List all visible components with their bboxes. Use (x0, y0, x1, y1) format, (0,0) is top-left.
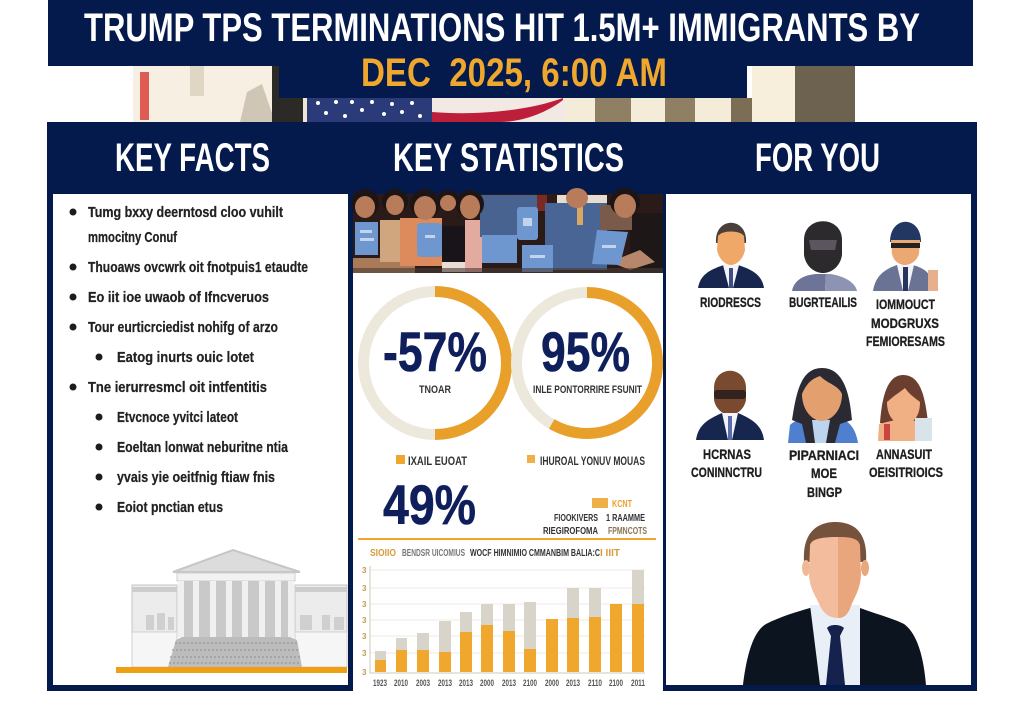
chart title (370, 548, 620, 559)
panel: key facts bullets: Eoiot pnctian etus (117, 499, 223, 516)
stacked bar chart: 3 (362, 584, 367, 593)
person 5: woman with long hair: BINGP (807, 484, 842, 500)
heading: key statistics: KEY STATISTICS (393, 136, 624, 180)
stacked bar chart: 2013 (502, 678, 516, 688)
person 4: man with dark skin: CONINNCTRU (691, 464, 762, 480)
panel: key facts bullets: Tne ierurresmcl oit intfentitis (88, 379, 267, 396)
legend: right item (527, 454, 645, 468)
statistic: 49%: 49% (383, 473, 476, 536)
donut chart: 95% (516, 292, 658, 434)
person 4: man with dark skin (691, 371, 764, 480)
legend: left item (396, 454, 468, 468)
panel: key facts bullets: Tour eurticrciedist nohifg of arzo (88, 319, 278, 336)
person 1: man in navy suit: RIODRESCS (700, 294, 761, 310)
person 2: bearded man (789, 221, 857, 310)
heading: for you: FOR YOU (755, 136, 880, 180)
stacked bar chart: 2010 (394, 678, 408, 688)
small key block: 1 RAAMME (606, 513, 645, 524)
small key block: FPMNCOTS (608, 526, 647, 537)
donut chart: -57%: -57% (383, 320, 487, 383)
person 3: man with glasses (866, 222, 945, 349)
title text line 2: DEC 2025, 6:00 AM (361, 51, 667, 95)
image: crowd holding documents (351, 188, 663, 273)
stacked bar chart: 2110 (588, 678, 602, 688)
legend: left item: IXAIL EUOAT (408, 454, 468, 468)
chart title: WOCF HIMNIMIO CMMANBIM BALIA:C (470, 548, 600, 559)
panel: key facts bullets: Thuoaws ovcwrk oit fnotpuis1 etaudte (88, 259, 308, 276)
stacked bar chart: 3 (362, 566, 367, 575)
small key block (543, 498, 647, 537)
large figure: man in dark suit (743, 522, 926, 685)
panel: key facts bullets: Tumg bxxy deerntosd cloo vuhilt (88, 204, 283, 221)
stacked bar chart: 3 (362, 616, 367, 625)
panel: key facts bullets: mmocitny Conuf (88, 229, 178, 246)
panel: key facts bullets: yvais yie oeitfnig ftiaw fnis (117, 469, 275, 486)
stacked bar chart: 2100 (609, 678, 623, 688)
panel: key facts bullets: Eoeltan lonwat neburitne ntia (117, 439, 289, 456)
stacked bar chart: 2013 (566, 678, 580, 688)
legend: right item: IHUROAL YONUV MOUAS (540, 454, 645, 468)
person 5: woman with long hair (788, 368, 859, 500)
small key block: FIOOKIVERS (554, 513, 598, 524)
stacked bar chart: 3 (362, 600, 367, 609)
person 3: man with glasses: IOMMOUCT (876, 296, 935, 312)
person 3: man with glasses: FEMIORESAMS (866, 333, 945, 349)
person 3: man with glasses: MODGRUXS (871, 315, 939, 331)
person 5: woman with long hair: PIPARNIACI (789, 447, 859, 463)
person 6: young woman with document: ANNASUIT (876, 446, 932, 462)
stacked bar chart: 2013 (459, 678, 473, 688)
stacked bar chart: 3 (362, 649, 367, 658)
chart title: SIOIIO (370, 548, 396, 559)
stacked bar chart: 2011 (631, 678, 645, 688)
person 6: young woman with document: OEISITRIOICS (869, 464, 943, 480)
stacked bar chart: 2000 (480, 678, 494, 688)
small key block: RIEGIROFOMA (543, 526, 598, 537)
person 4: man with dark skin: HCRNAS (703, 446, 751, 462)
person 1: man in navy suit (698, 223, 764, 310)
panel: key facts bullets: Eatog inurts ouic lotet (117, 349, 254, 366)
stacked bar chart (362, 566, 645, 688)
stacked bar chart: 2100 (523, 678, 537, 688)
chart title: I IIIT (600, 548, 620, 559)
panel frame (47, 122, 977, 691)
person 2: bearded man: BUGRTEAILIS (789, 294, 857, 310)
donut chart: -57% (364, 292, 506, 434)
panel: key facts bullets: Etvcnoce yvitci lateot (117, 409, 238, 426)
stacked bar chart: 3 (362, 668, 367, 677)
heading: key facts: KEY FACTS (115, 136, 270, 180)
small key block: KCNT (612, 499, 632, 510)
stacked bar chart: 2000 (545, 678, 559, 688)
donut chart: 95%: 95% (541, 320, 630, 383)
photo strip behind title (133, 66, 855, 122)
person 5: woman with long hair: MOE (811, 465, 837, 481)
stacked bar chart: 1923 (373, 678, 387, 688)
stacked bar chart: 2013 (438, 678, 452, 688)
panel: key facts bullets (70, 204, 308, 516)
panel: key facts bullets: Eo iit ioe uwaob of Ifncveruos (88, 289, 269, 306)
person 6: young woman with document (869, 375, 943, 480)
chart title: BENDSR UICOMIUS (402, 548, 465, 559)
donut chart: -57%: TNOAR (419, 384, 451, 396)
title banner (48, 0, 973, 98)
stacked bar chart: 2003 (416, 678, 430, 688)
stacked bar chart: 3 (362, 632, 367, 641)
illustration: court building (116, 550, 347, 673)
donut chart: 95%: INLE PONTORRIRE FSUNIT (533, 384, 642, 396)
